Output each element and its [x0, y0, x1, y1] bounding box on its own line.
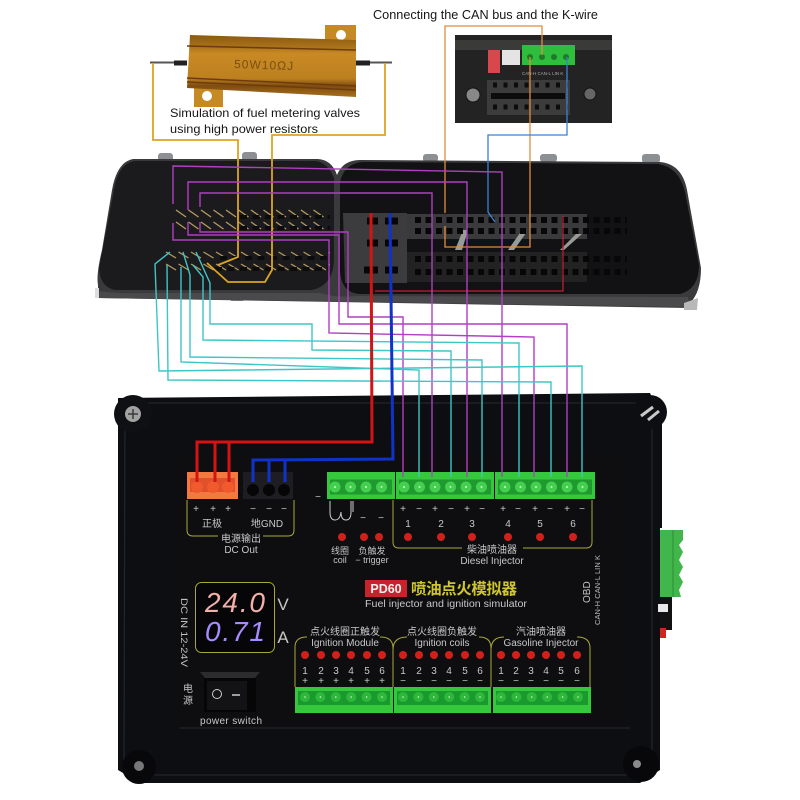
ignition coils section: −	[462, 676, 468, 687]
diesel injector section: 4	[505, 519, 511, 530]
side OBD plug	[658, 530, 683, 638]
diesel injector section: 5	[537, 519, 543, 530]
OBD labels: OBD	[582, 581, 593, 603]
diesel injector section: +	[564, 504, 570, 515]
crimson ECU wire	[375, 216, 563, 291]
ignition coils section: 4	[446, 666, 452, 677]
power labels: −	[281, 504, 287, 515]
power labels: 正极	[202, 517, 222, 530]
blue K-line wire	[488, 57, 567, 222]
device title: PD60	[370, 582, 402, 596]
upper green terminal blocks	[327, 472, 595, 499]
power labels: +	[193, 504, 199, 515]
lower green terminal blocks	[295, 687, 591, 713]
diesel injector section: 柴油喷油器	[467, 543, 517, 556]
CAN bus heading: Connecting the CAN bus and the K-wire	[373, 8, 598, 22]
resistor photo: 50W10ΩJ	[234, 57, 294, 73]
digital meter: A	[277, 628, 289, 647]
coil and trigger section: − trigger	[355, 555, 389, 565]
OBD labels: CAN-H CAN-L LIN K	[593, 555, 602, 625]
diesel injector section: Diesel Injector	[460, 556, 524, 567]
diesel injector section: −	[515, 504, 521, 515]
ignition module section: +	[302, 676, 308, 687]
coil and trigger section: −	[360, 513, 366, 524]
ignition module section: 2	[318, 666, 324, 677]
cyan injector wires	[155, 252, 582, 477]
coil and trigger section	[315, 492, 389, 565]
coil and trigger section: −	[378, 513, 384, 524]
ignition module section: +	[348, 676, 354, 687]
ignition module section: 4	[348, 666, 354, 677]
diesel injector section: −	[579, 504, 585, 515]
resistor photo	[150, 25, 392, 107]
digital meter	[196, 582, 289, 652]
power switch	[183, 672, 262, 727]
OBD labels	[582, 555, 602, 625]
diesel injector section: +	[532, 504, 538, 515]
ignition module section: 1	[302, 666, 308, 677]
gasoline injector section: Gasoline Injector	[503, 638, 579, 649]
orange CAN wires	[445, 26, 542, 247]
coil and trigger section: coil	[333, 555, 347, 565]
power labels: −	[250, 504, 256, 515]
power switch: 电	[183, 682, 193, 695]
OBD connector photo: CAN-H CAN-L LIN K	[522, 71, 563, 76]
power output connectors	[187, 472, 294, 556]
device title: 喷油点火模拟器	[411, 579, 517, 598]
gasoline injector section	[491, 625, 590, 687]
power labels: 电源输出	[221, 532, 261, 545]
ignition coils section: −	[477, 676, 483, 687]
gasoline injector section: 4	[543, 666, 549, 677]
diesel injector section: 2	[438, 519, 444, 530]
ignition module section: 5	[364, 666, 370, 677]
device title: Fuel injector and ignition simulator	[365, 598, 527, 610]
diesel injector section: −	[448, 504, 454, 515]
resistor caption: Simulation of fuel metering valves	[170, 106, 360, 120]
gasoline injector section: −	[528, 676, 534, 687]
ignition module section: +	[379, 676, 385, 687]
red power wire	[197, 213, 372, 482]
power labels: +	[210, 504, 216, 515]
power switch: 源	[183, 694, 193, 707]
gold resistor wires	[153, 63, 385, 282]
corner screws	[114, 395, 667, 784]
digital meter: 0.71	[205, 616, 265, 647]
ignition module section: +	[333, 676, 339, 687]
purple injector wires	[173, 166, 567, 477]
gasoline injector section: −	[574, 676, 580, 687]
power labels: 地GND	[251, 517, 283, 530]
gasoline injector section: −	[543, 676, 549, 687]
orange connector	[187, 472, 238, 499]
ignition module section: 3	[333, 666, 339, 677]
power switch: power switch	[200, 716, 262, 727]
digital meter: V	[277, 595, 289, 614]
ignition coils section: 点火线圈负触发	[407, 625, 477, 638]
gasoline injector section: 6	[574, 666, 580, 677]
gasoline injector section: 汽油喷油器	[516, 625, 566, 638]
blue ground wire	[253, 213, 393, 482]
gasoline injector section: −	[513, 676, 519, 687]
voltage input label: DC IN 12-24V	[178, 598, 189, 668]
diesel injector section: +	[400, 504, 406, 515]
diesel injector section	[393, 500, 592, 567]
ignition module section: +	[364, 676, 370, 687]
ignition coils section: Ignition coils	[414, 638, 470, 649]
ignition coils section: −	[431, 676, 437, 687]
ignition coils section	[393, 625, 491, 687]
ignition coils section: −	[416, 676, 422, 687]
gasoline injector section: −	[498, 676, 504, 687]
ECU connector housing	[95, 152, 701, 310]
ignition coils section: 6	[477, 666, 483, 677]
gasoline injector section: 3	[528, 666, 534, 677]
ignition module section	[295, 625, 393, 687]
gasoline injector section: 2	[513, 666, 519, 677]
gasoline injector section: −	[558, 676, 564, 687]
ignition coils section: −	[446, 676, 452, 687]
ignition coils section: 2	[416, 666, 422, 677]
ignition module section: 点火线圈正触发	[310, 625, 380, 638]
diesel injector section: −	[547, 504, 553, 515]
diesel injector section: −	[479, 504, 485, 515]
gasoline injector section: 1	[498, 666, 504, 677]
simulator device body	[118, 393, 662, 783]
ignition module section: +	[318, 676, 324, 687]
diesel injector section: 6	[570, 519, 576, 530]
power labels	[187, 500, 294, 556]
gasoline injector section: 5	[558, 666, 564, 677]
coil and trigger section: −	[315, 492, 321, 503]
ignition module section: Ignition Module	[311, 638, 379, 649]
diesel injector section: +	[432, 504, 438, 515]
coil and trigger section: 负触发	[358, 545, 386, 556]
power labels: −	[266, 504, 272, 515]
ignition coils section: 3	[431, 666, 437, 677]
power labels: DC Out	[224, 545, 258, 556]
power labels: +	[225, 504, 231, 515]
coil and trigger section: 线圈	[331, 545, 349, 556]
diesel injector section: +	[500, 504, 506, 515]
ignition module section: 6	[379, 666, 385, 677]
device title	[365, 579, 527, 610]
resistor caption	[170, 106, 360, 136]
diesel injector section: 1	[405, 519, 411, 530]
diesel injector section: +	[464, 504, 470, 515]
ignition coils section: −	[400, 676, 406, 687]
digital meter: 24.0	[204, 587, 265, 618]
OBD connector photo	[455, 35, 612, 123]
resistor caption: using high power resistors	[170, 122, 318, 136]
ignition coils section: 5	[462, 666, 468, 677]
ignition coils section: 1	[400, 666, 406, 677]
diesel injector section: 3	[469, 519, 475, 530]
diesel injector section: −	[416, 504, 422, 515]
ECU pins	[165, 209, 627, 274]
black connector	[243, 472, 293, 499]
